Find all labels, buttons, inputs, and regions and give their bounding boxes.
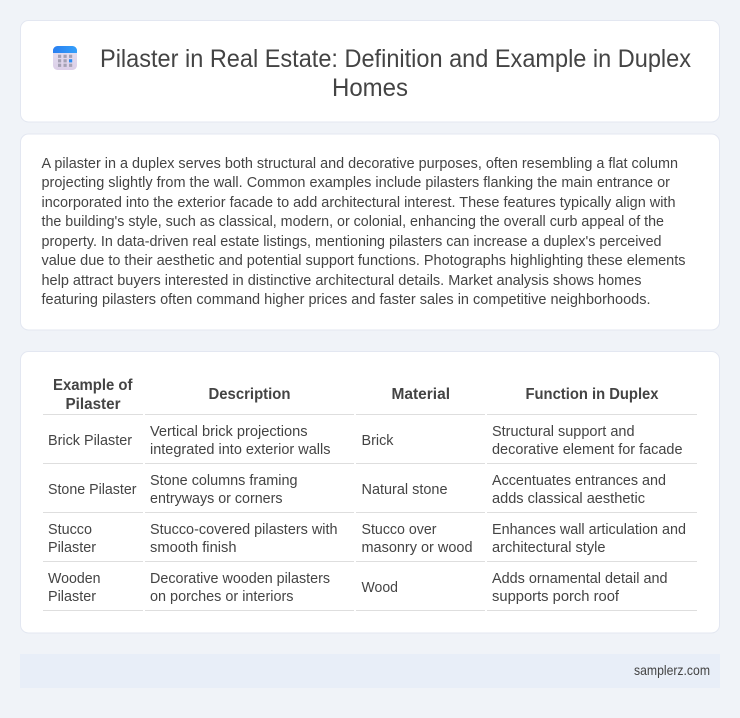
table row: stone pilaster: Accentuates entrances and <box>492 473 666 489</box>
table row: wooden pilaster: Wooden <box>48 571 100 587</box>
table row: stone pilaster: adds classical aesthetic <box>492 491 645 507</box>
text block: description paragraph: incorporated into the exterior facade to add architectural interest. These features typically align with <box>42 195 676 211</box>
table row: stucco pilaster: masonry or wood <box>362 540 472 556</box>
title <box>100 45 691 102</box>
text block: description paragraph: the building's style, such as classical, modern, or colonial, enhancing the overall curb appeal of the <box>42 214 664 230</box>
table row: wooden pilaster: Adds ornamental detail and <box>492 571 668 587</box>
table row: stone pilaster: Stone columns framing <box>150 473 298 489</box>
table row: brick pilaster: Structural support and <box>492 424 634 440</box>
table row: stucco pilaster: Enhances wall articulation and <box>492 522 686 538</box>
table row: stucco pilaster: Stucco-covered pilasters with <box>150 522 338 538</box>
table row: stucco pilaster <box>48 522 686 556</box>
table row: brick pilaster <box>48 424 682 458</box>
table row: stucco pilaster: Stucco <box>48 522 92 538</box>
table rules <box>43 414 697 611</box>
text block: description paragraph: value due to their aesthetic and potential support functions. Photographs highlighting these elements <box>42 253 686 269</box>
table row: stucco pilaster: Stucco over <box>362 522 437 538</box>
text block: description paragraph <box>42 156 686 308</box>
table row: stone pilaster <box>48 473 666 507</box>
text block: description paragraph: help attract buyers interested in distinctive architectural details. Market analysis shows homes <box>42 273 642 289</box>
table header: Description <box>208 386 290 403</box>
panel: description card <box>20 134 720 330</box>
footer <box>20 654 720 688</box>
table row: brick pilaster: decorative element for facade <box>492 442 682 458</box>
table row: stucco pilaster: Pilaster <box>48 540 96 556</box>
table row: brick pilaster: integrated into exterior walls <box>150 442 330 458</box>
panel: table card <box>20 352 720 633</box>
table row: stucco pilaster: smooth finish <box>150 540 236 556</box>
text block: description paragraph: featuring pilasters often command higher prices and faster sales in competitive neighborhoods. <box>42 292 650 308</box>
title: Pilaster in Real Estate: Definition and Example in Duplex <box>100 45 691 73</box>
table row: wooden pilaster: Pilaster <box>48 589 96 605</box>
table row: stone pilaster: Stone Pilaster <box>48 482 137 498</box>
text block: description paragraph: property. In data-driven real estate listings, mentioning pilasters can increase a duplex's perceived <box>42 234 662 250</box>
table row: wooden pilaster <box>48 571 668 605</box>
table row: brick pilaster: Brick <box>362 433 394 449</box>
table header: Example of <box>53 377 133 394</box>
text block: description paragraph: projecting slightly from the wall. Common examples include pilasters flanking the main entrance or <box>42 175 670 191</box>
table row: wooden pilaster: Decorative wooden pilasters <box>150 571 330 587</box>
table row: stone pilaster: Natural stone <box>362 482 448 498</box>
table row: brick pilaster: Brick Pilaster <box>48 433 132 449</box>
title: Homes <box>332 74 408 102</box>
table header <box>53 377 659 413</box>
table row: wooden pilaster: on porches or interiors <box>150 589 294 605</box>
table row: wooden pilaster: Wood <box>362 580 398 596</box>
table row: brick pilaster: Vertical brick projections <box>150 424 308 440</box>
table row: wooden pilaster: supports porch roof <box>492 589 620 605</box>
icon: calendar <box>53 46 77 70</box>
table row: stone pilaster: entryways or corners <box>150 491 282 507</box>
panel: title card <box>20 20 720 122</box>
text block: description paragraph: A pilaster in a duplex serves both structural and decorative purposes, often resembling a flat column <box>42 156 678 172</box>
table row: stucco pilaster: architectural style <box>492 540 606 556</box>
table header: Function in Duplex <box>526 386 659 403</box>
table header: Pilaster <box>66 396 120 413</box>
table header: Material <box>392 386 450 403</box>
footer: samplerz.com <box>634 663 710 678</box>
